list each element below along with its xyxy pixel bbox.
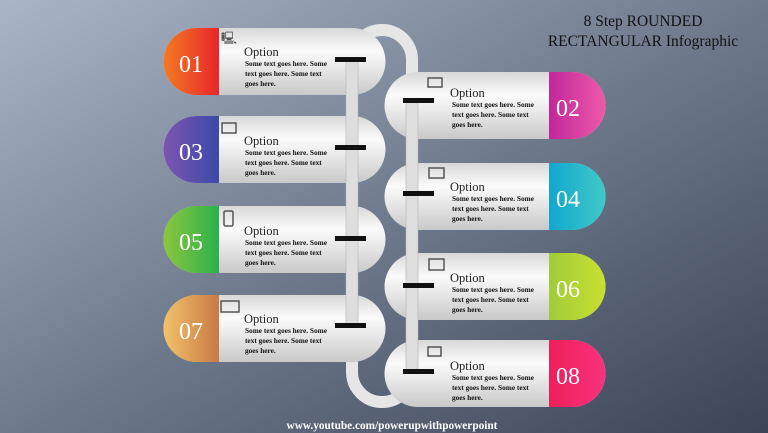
pill 04: Some text goes here. Some xyxy=(452,194,535,203)
pill 04: 04 xyxy=(556,187,580,213)
pill 04: Option xyxy=(450,180,485,194)
pill 08: text goes here. Some text xyxy=(452,383,529,392)
pill 02: 02 xyxy=(556,96,580,122)
pill 04: goes here. xyxy=(452,214,483,223)
pill 06: 06 xyxy=(556,277,580,303)
pill 08: goes here. xyxy=(452,393,483,402)
T bars xyxy=(335,57,434,374)
pill 05: goes here. xyxy=(245,258,276,267)
pill 07: text goes here. Some text xyxy=(245,336,322,345)
pill 08 xyxy=(384,340,606,407)
pill 07: Some text goes here. Some xyxy=(245,326,328,335)
pill 01: text goes here. Some text xyxy=(245,69,322,78)
pill 06: text goes here. Some text xyxy=(452,295,529,304)
pill 03: text goes here. Some text xyxy=(245,158,322,167)
pill 02: Option xyxy=(450,86,485,100)
pill 02: goes here. xyxy=(452,120,483,129)
pill 03: 03 xyxy=(179,140,203,166)
pill 03: Option xyxy=(244,134,279,148)
pill 07: goes here. xyxy=(245,346,276,355)
pill 02: Some text goes here. Some xyxy=(452,100,535,109)
pill 07: 07 xyxy=(179,319,203,345)
connectors xyxy=(352,30,412,402)
pill 05: 05 xyxy=(179,230,203,256)
pill 01 xyxy=(164,28,386,95)
pill 01: goes here. xyxy=(245,79,276,88)
pill 07 xyxy=(164,295,386,362)
pill 01: Some text goes here. Some xyxy=(245,59,328,68)
pill 04: text goes here. Some text xyxy=(452,204,529,213)
title: RECTANGULAR Infographic xyxy=(548,33,738,50)
pill 06: goes here. xyxy=(452,305,483,314)
pill 02: text goes here. Some text xyxy=(452,110,529,119)
pill 06 xyxy=(384,253,606,320)
pill 03: goes here. xyxy=(245,168,276,177)
title xyxy=(548,13,738,50)
pill 07: Option xyxy=(244,312,279,326)
pill 08: 08 xyxy=(556,364,580,390)
pill 04 xyxy=(384,163,606,230)
connector stems over pills xyxy=(346,61,418,370)
pill 03 xyxy=(164,116,386,183)
pill 05: Option xyxy=(244,224,279,238)
pill 05: Some text goes here. Some xyxy=(245,238,328,247)
footer url: www.youtube.com/powerupwithpowerpoint xyxy=(287,420,498,432)
pill 01: Option xyxy=(244,45,279,59)
pill 08: Option xyxy=(450,359,485,373)
pill 03: Some text goes here. Some xyxy=(245,148,328,157)
pill 01: 01 xyxy=(179,52,203,78)
pill 06: Some text goes here. Some xyxy=(452,285,535,294)
pill 06: Option xyxy=(450,271,485,285)
pill 08: Some text goes here. Some xyxy=(452,373,535,382)
pill 01: 🖳 xyxy=(221,31,237,45)
pill 05 xyxy=(164,206,386,273)
title: 8 Step ROUNDED xyxy=(584,13,702,30)
pill 02 xyxy=(384,72,606,139)
pill 05: text goes here. Some text xyxy=(245,248,322,257)
